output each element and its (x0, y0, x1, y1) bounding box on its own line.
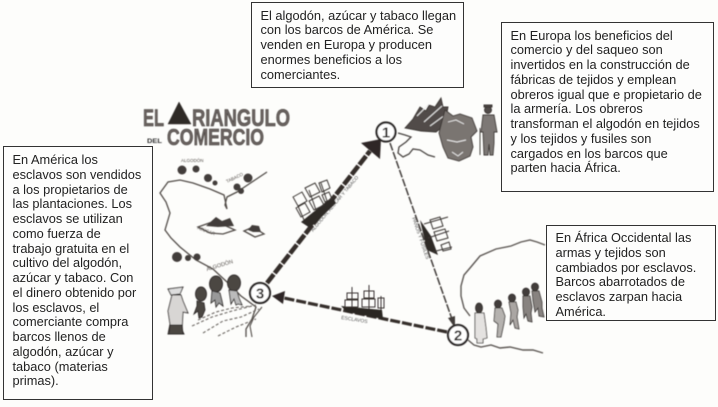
diagram title (143, 102, 290, 150)
text box: America: esclavos son vendidos (12, 167, 141, 182)
map: America coast and plantations: AZÚCAR (197, 224, 217, 237)
text box: America: el dinero obtenido por (12, 285, 136, 300)
node 3 (250, 283, 270, 303)
text box: America: algodón, azúcar y (12, 344, 114, 359)
map: America coast and plantations: ALGODÓN (206, 258, 234, 273)
text box: America: comerciante compra (12, 314, 128, 329)
text box: Europe: comercio y del saqueo son (510, 42, 663, 57)
figures: overseer and enslaved workers (168, 275, 242, 334)
node 1: 1 (382, 124, 390, 142)
ship on America-Europe route (293, 180, 336, 228)
text box: America: como fuerza de (12, 226, 101, 241)
text box: West Africa: América. (556, 304, 606, 319)
text box: Europe (501, 22, 714, 192)
ship on Europe-Africa route (420, 217, 452, 255)
text box: America: a los propietarios de (12, 182, 128, 196)
text box: top, goods reach Europe: enormes beneficios a los (260, 52, 402, 67)
map: America coast and plantations: TABACO (225, 171, 244, 184)
map: America coast and plantations: ALGODÓN (181, 157, 204, 163)
diagram title: COMERCIO (167, 124, 264, 150)
map: America coast and plantations (160, 157, 267, 337)
text box: Europe: cargados en los barcos que (510, 146, 668, 160)
text box: West Africa: Barcos abarrotados de (556, 274, 685, 289)
arrow: America to Europe: ALGODÓN, AZÚCAR Y TABACO (309, 174, 360, 233)
text box: Europe: parten hacia África. (510, 160, 621, 175)
text box: America: barcos llenos de (12, 329, 106, 344)
text box: West Africa (546, 225, 716, 321)
text box: Europe: obreros igual que e propietario de (510, 86, 702, 102)
ship on Africa-America route (341, 285, 384, 319)
node 2: 2 (454, 328, 462, 344)
figures: chained captives (475, 283, 544, 343)
text box: America: trabajo gratuita en el (12, 240, 129, 256)
text box: Europe: transforman el algodón en tejidos (510, 116, 700, 131)
arrow: Europe to Africa (390, 143, 455, 328)
arrow: America to Europe (267, 139, 381, 283)
text box: America: primas). (12, 373, 59, 388)
text box: top, goods reach Europe: venden en Europa y producen (260, 37, 432, 52)
text box: West Africa: cambiados por esclavos. (556, 260, 696, 274)
text box: America: las plantaciones. Los (12, 196, 132, 211)
arrow: Africa to America (272, 291, 447, 332)
diagram title: RIANGULO (192, 105, 290, 132)
text box: top, goods reach Europe (251, 2, 464, 88)
node 2 (448, 325, 468, 345)
node 1 (376, 122, 396, 142)
text box: America (3, 146, 153, 400)
text box: Europe: y los tejidos y fusiles son (510, 131, 651, 146)
text box: West Africa: esclavos zarpan hacia (556, 289, 682, 304)
text box: Europe: invertidos en la construcción de (510, 57, 690, 72)
text box: America: tabaco (materias (12, 358, 108, 374)
arrow: Europe to Africa: PAÑOS Y FUSILES (410, 216, 431, 261)
text box: America: azúcar y tabaco. Con (12, 270, 133, 285)
text box: Europe: fábricas de tejidos y emplean (510, 72, 676, 87)
diagram title: EL (143, 105, 164, 132)
node 3: 3 (256, 286, 264, 302)
text box: Europe: la armería. Los obreros (510, 101, 643, 116)
diagram title: DEL (147, 139, 162, 145)
arrow: Africa to America: ESCLAVOS (341, 315, 369, 325)
text box: America: esclavos se utilizan (12, 211, 123, 226)
text box: top, goods reach Europe: con los barcos de América. Se (260, 22, 433, 37)
map: Europe (398, 98, 497, 161)
text box: West Africa: armas y tejidos son (556, 245, 666, 260)
text box: America: cultivo del algodón, (12, 255, 122, 270)
text box: top, goods reach Europe: comerciantes. (260, 66, 340, 82)
text box: top, goods reach Europe: El algodón, azúcar y tabaco llegan (260, 8, 456, 22)
cotton field (192, 305, 262, 337)
text box: Europe: En Europa los beneficios del (510, 28, 673, 42)
text box: America: En América los (12, 152, 98, 167)
map: Africa coast (461, 240, 545, 353)
text box: America: los esclavos, el (12, 300, 99, 314)
text box: West Africa: En África Occidental las (556, 230, 691, 245)
